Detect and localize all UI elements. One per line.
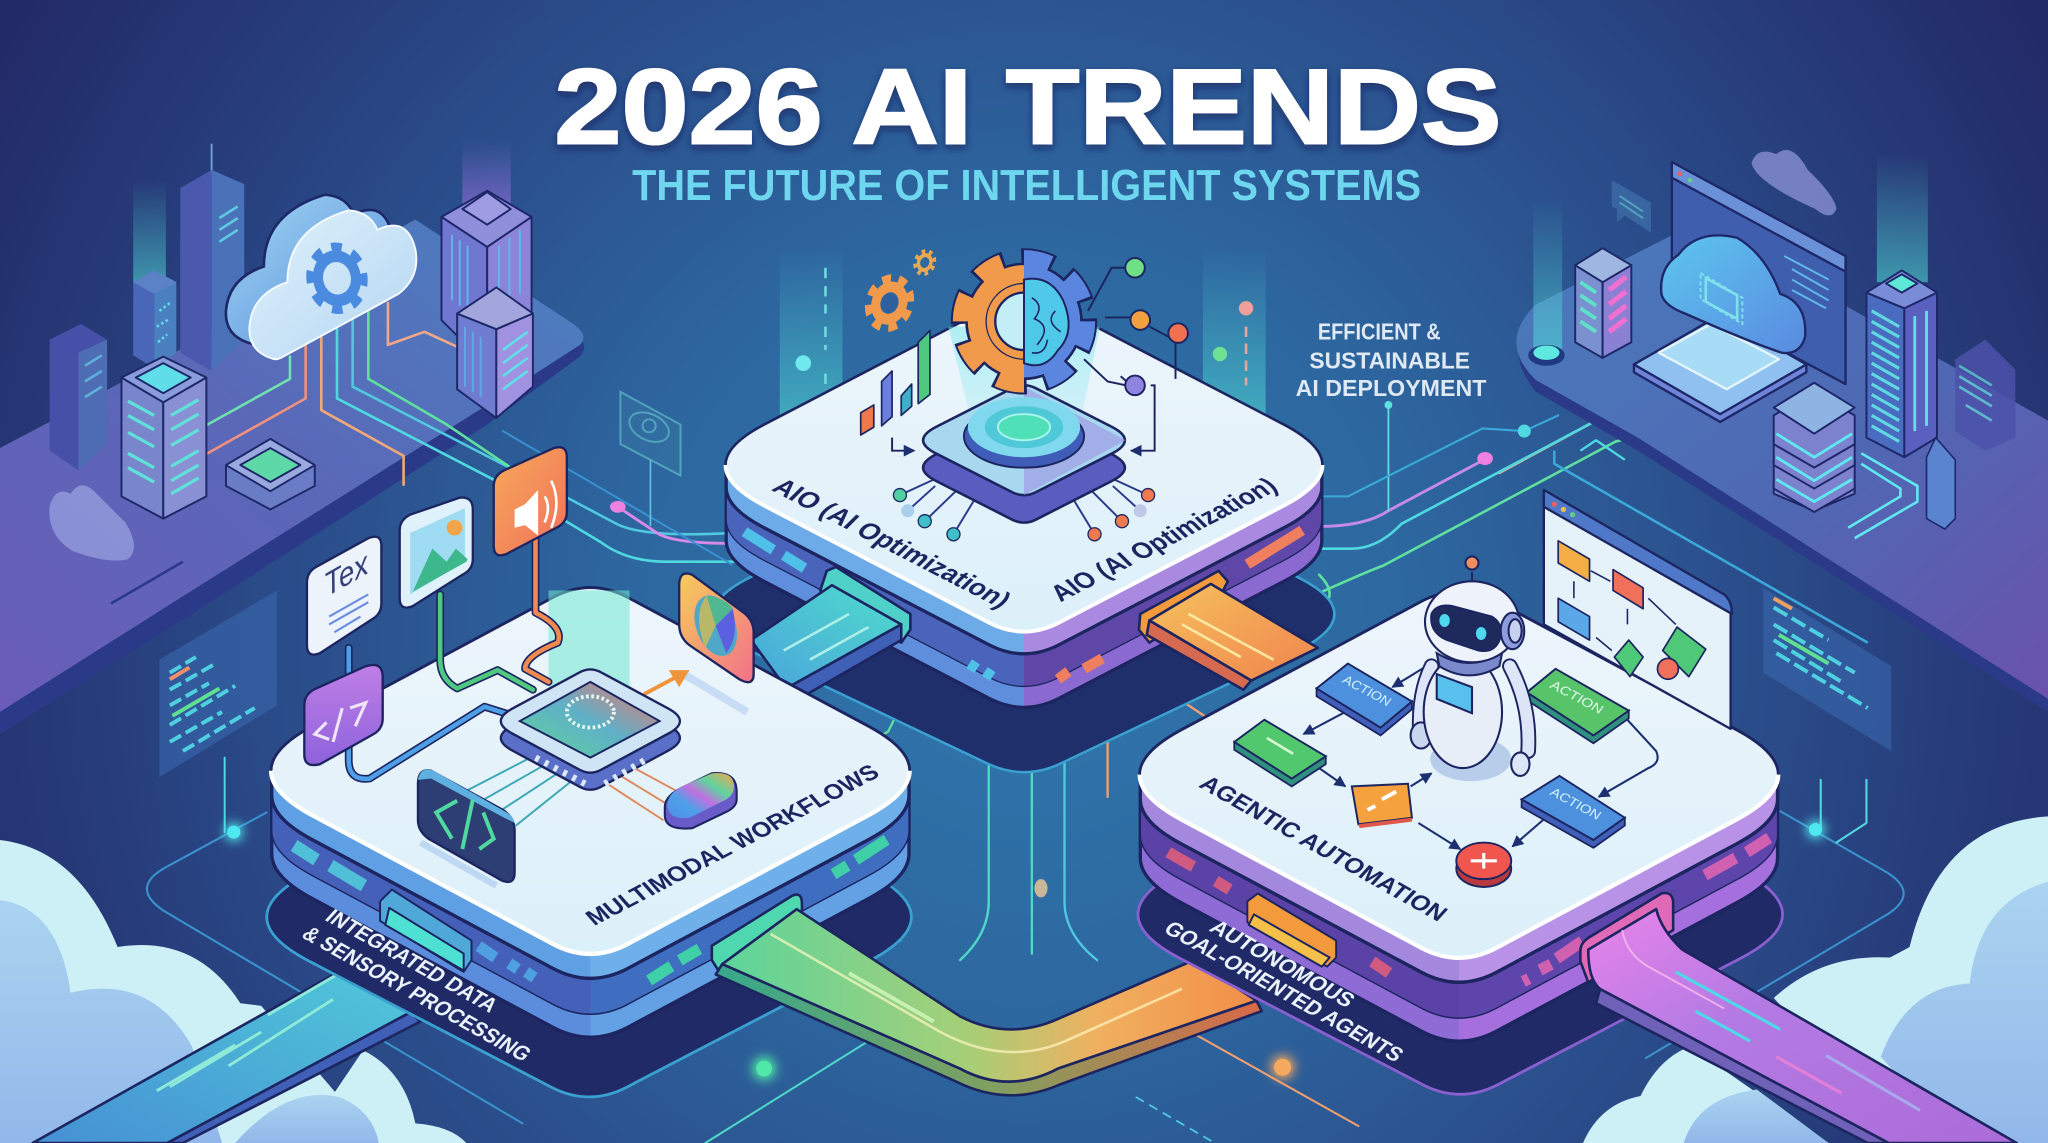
icon: chat tile: [1612, 180, 1651, 233]
beam: multimodal hologram: [549, 590, 630, 695]
robot shadow: [1430, 737, 1511, 781]
robot: [1411, 556, 1529, 776]
building: beam tower: [133, 180, 176, 368]
chip: multimodal processor: [460, 669, 692, 826]
subtitle: THE FUTURE OF INTELLIGENT SYSTEMS: [632, 162, 1421, 210]
label: AIO left: AIO (AI Optimization): [767, 473, 1018, 613]
server with pink stripes: [1575, 248, 1631, 358]
pillar: [1927, 438, 1955, 529]
icon: rainbow pill: [665, 773, 737, 829]
clouds bottom left lower: [235, 1050, 466, 1143]
right slab traces: [1554, 440, 1917, 643]
pad: center platform shadow: [714, 456, 1334, 772]
device plate with cloud: [1634, 315, 1806, 422]
label: AIO right: AIO (AI Optimization): [1043, 472, 1283, 606]
bar chart: [861, 330, 930, 435]
socket: multimodal front left: [380, 890, 472, 972]
beam and disc: [1528, 199, 1565, 366]
action box: orange: [1352, 784, 1412, 828]
panel: AIO center platform: [726, 249, 1322, 707]
pad: multimodal shadow: [267, 737, 911, 1097]
icon: small chip on slab: [226, 439, 315, 509]
light beams beside AIO: [780, 248, 1266, 425]
icon: speaker tile: [494, 447, 567, 555]
icon: eye tile: [620, 392, 680, 475]
action box: green: [1527, 669, 1629, 743]
code panel left: [159, 590, 277, 777]
flow window: [1544, 490, 1732, 729]
action box: blue top: [1317, 664, 1412, 735]
clouds bottom left: [0, 840, 379, 1143]
chip: AIO processor: [893, 385, 1155, 541]
label: goal-oriented agents: GOAL-ORIENTED AGENTS: [1159, 917, 1409, 1066]
ribbon: center to multimodal: [751, 567, 910, 700]
left city slab: [0, 219, 584, 734]
title: 2026 AI TRENDS: [554, 47, 1501, 167]
building: tall back tower: [180, 144, 244, 371]
node graph: [892, 258, 1188, 451]
label: autonomous: AUTONOMOUS: [1205, 915, 1360, 1012]
tall striped tower: [1866, 154, 1937, 457]
ribbon: multimodal to agentic: [712, 895, 1262, 1095]
action box: blue bottom: ACTION: [1547, 785, 1604, 823]
icon: text tile: [307, 537, 381, 655]
building: purple tower front: [457, 287, 533, 418]
icon: pie chart tile: [679, 573, 754, 712]
icon: image tile: [400, 498, 473, 608]
button: red stop: [1456, 843, 1511, 887]
traces: icon connections: [349, 539, 690, 779]
icon: gear and brain: [963, 260, 1085, 383]
icon: gear cloud: [226, 195, 416, 359]
building: dim left tower: [50, 324, 107, 470]
icon: text tile: Tex: [321, 543, 372, 604]
right city: dim cloud: [1752, 150, 1836, 216]
label: sensory processing: & SENSORY PROCESSING: [297, 922, 536, 1066]
label: efficient and sustainable deployment: SUSTAINABLE: [1309, 347, 1470, 373]
action box: green: ACTION: [1547, 678, 1606, 717]
panel: multimodal platform: [271, 447, 910, 1066]
glowing nodes: [225, 401, 1825, 1080]
clouds bottom right: [1583, 816, 2048, 1143]
code panel right: [1763, 588, 1891, 751]
socket: agentic front left: [1247, 893, 1336, 967]
icon: dim cloud left: [49, 485, 134, 561]
action box: blue top: ACTION: [1340, 673, 1394, 709]
ribbon: agentic to bottom right: [1580, 893, 2017, 1143]
building: server tower: [121, 357, 206, 519]
pad: agentic shadow: [1138, 735, 1783, 1094]
ribbon: center to agentic: [1139, 571, 1318, 690]
label: multimodal workflows: MULTIMODAL WORKFLOWS: [580, 760, 885, 930]
monitor: [1672, 162, 1846, 384]
icon: code purple tile: [304, 665, 383, 765]
label: integrated data: INTEGRATED DATA: [321, 905, 503, 1017]
building: purple tower back: [441, 141, 532, 366]
server stack: [1774, 383, 1855, 512]
label: efficient and sustainable deployment: EFFICIENT &: [1318, 319, 1441, 345]
icon: small gears: [864, 249, 937, 331]
action box: blue bottom: [1522, 776, 1625, 848]
beam: AIO hologram: [948, 327, 1100, 418]
right city slab: [1516, 222, 2048, 712]
left city traces: [208, 303, 513, 490]
dim tower right: [1955, 340, 2015, 451]
circuit traces: background network: [147, 380, 1904, 1143]
panel: agentic platform: [1140, 490, 1778, 1066]
icon: chip cloud: [1661, 235, 1805, 353]
label: efficient and sustainable deployment: AI DEPLOYMENT: [1296, 375, 1486, 401]
action box: green plain: [1234, 720, 1326, 786]
arrows: flow connectors: [1304, 666, 1658, 849]
label: agentic automation: AGENTIC AUTOMATION: [1194, 772, 1452, 926]
icon: code dark tile: [418, 769, 515, 886]
ribbon: bottom left blue: [33, 969, 421, 1143]
label: efficient and sustainable deployment: [1296, 319, 1486, 401]
